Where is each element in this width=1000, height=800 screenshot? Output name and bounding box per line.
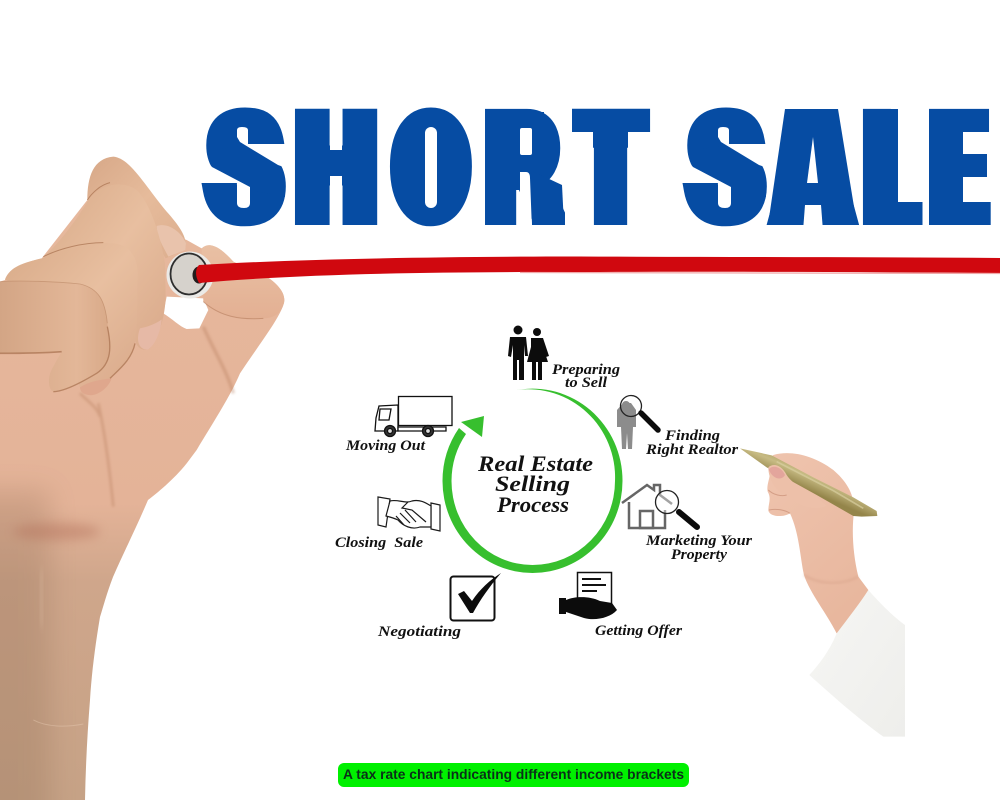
label: finding right realtor: Finding (664, 428, 721, 444)
icon: person under magnifier (617, 396, 658, 449)
third finger (5, 243, 138, 387)
palm and forearm (0, 200, 284, 800)
title: SHORT SALE: H (297, 92, 375, 242)
center label: Selling (495, 471, 570, 496)
label: moving out: Moving Out (345, 438, 426, 454)
finger creases (768, 490, 790, 513)
second fingernail (138, 319, 162, 349)
hand and wrist (767, 453, 868, 633)
white sleeve (809, 590, 905, 737)
title: SHORT SALE: A (777, 93, 849, 242)
marker cap (166, 252, 214, 298)
label: marketing your property (645, 533, 752, 563)
circular green arrow (442, 389, 623, 573)
center label: Real Estate (477, 451, 593, 476)
label: preparing to sell: to Sell (565, 375, 608, 391)
icon: hand with document (559, 572, 617, 619)
forearm shading (0, 490, 50, 800)
title: SHORT SALE: T (579, 93, 642, 242)
wrist shadow and tendon highlight (13, 523, 100, 726)
icon: handshake (378, 497, 440, 531)
title: SHORT SALE: R (487, 91, 557, 242)
top finger (87, 157, 186, 258)
illustration: left hand holding marker (0, 157, 284, 800)
fourth finger (0, 281, 110, 392)
icon: couple (508, 326, 549, 380)
icon: house with magnifier (622, 485, 697, 528)
label: preparing to sell: Preparing (552, 362, 621, 378)
center label (477, 451, 593, 517)
second finger (43, 184, 166, 350)
label: finding right realtor (645, 428, 738, 458)
label: finding right realtor: Right Realtor (645, 442, 738, 458)
caption pill: A tax rate chart indicating different income brackets (343, 766, 684, 782)
icon: checkbox (450, 573, 501, 620)
icon: truck (375, 396, 452, 436)
label: marketing your property: Marketing Your (645, 533, 752, 549)
title: SHORT SALE: O (394, 91, 467, 242)
title: SHORT SALE: S (690, 91, 761, 242)
title: SHORT SALE: L (865, 92, 917, 242)
label: marketing your property: Property (671, 547, 727, 563)
caption pill (338, 763, 689, 787)
title: SHORT SALE: E (931, 92, 986, 242)
finger creases (0, 183, 135, 392)
label: closing sale: Closing Sale (335, 535, 423, 551)
title: SHORT SALE (198, 91, 995, 242)
thumb (202, 245, 284, 319)
wrist shading (804, 575, 858, 583)
top fingernail (157, 225, 186, 257)
diagram: real estate selling process (335, 326, 752, 640)
title: SHORT SALE: S (209, 91, 280, 242)
red marker line (196, 256, 1000, 283)
label: getting offer: Getting Offer (595, 623, 682, 639)
label: preparing to sell (552, 362, 621, 391)
gap between thumb and fingers (163, 297, 208, 329)
index fingertip and nail (768, 465, 827, 508)
lower nail (80, 378, 112, 395)
soft palm shading (80, 327, 233, 507)
pen highlight (777, 462, 863, 508)
illustration: right hand with gold pen (740, 448, 905, 737)
label: negotiating: Negotiating (377, 624, 462, 640)
gold pen (740, 448, 877, 517)
center label: Process (496, 492, 569, 517)
